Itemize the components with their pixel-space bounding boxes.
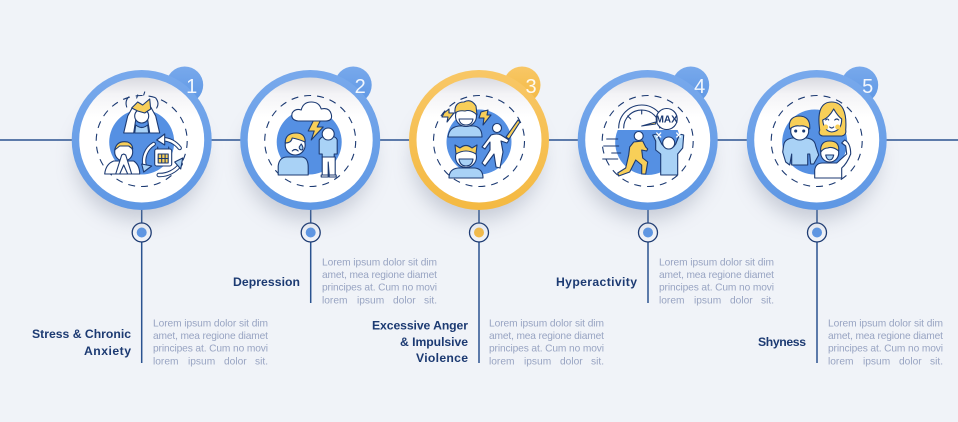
description 2	[322, 258, 437, 306]
icon: shy child with parents	[783, 102, 851, 178]
panel: step 3 excessive anger and impulsive violence	[372, 66, 604, 368]
connector with node 1	[132, 205, 151, 363]
description 5: ipsum	[863, 356, 890, 368]
description 4: lorem	[659, 296, 684, 306]
badge circle 2: 2	[355, 76, 366, 98]
connector with node 3	[470, 205, 488, 363]
description 1: Lorem ipsum dolor sit dim	[153, 318, 268, 330]
description 1: ipsum	[188, 356, 215, 368]
description 3: dolor	[560, 356, 583, 368]
description 2: ipsum	[357, 296, 384, 306]
description 2: amet, mea regione diamet	[322, 270, 437, 281]
badge circle 3	[409, 66, 549, 220]
panel: step 2 depression	[233, 66, 437, 306]
badge circle 3: 3	[525, 76, 537, 98]
description 3: ipsum	[524, 356, 551, 368]
description 4: sit.	[761, 296, 774, 306]
description 4: ipsum	[694, 296, 721, 306]
panel: step 5 shyness	[747, 66, 943, 368]
description 3: principes at. Cum no movi	[489, 344, 604, 354]
icon: stressed person and calendar cycle	[105, 92, 183, 175]
heading: excessive anger and impulsive violence: Violence	[416, 351, 468, 365]
description 5: principes at. Cum no movi	[828, 344, 943, 354]
badge circle 5	[747, 66, 887, 220]
connector with node 2	[301, 205, 320, 303]
description 5: amet, mea regione diamet	[828, 331, 943, 342]
description 2: Lorem ipsum dolor sit dim	[322, 258, 437, 268]
timeline axis	[0, 139, 958, 141]
icon: speedometer at max with running and shouting people	[603, 105, 684, 176]
description 5: lorem	[828, 356, 853, 368]
heading: shyness: Shyness	[758, 335, 806, 349]
description 1: principes at. Cum no movi	[153, 344, 268, 354]
description 2: principes at. Cum no movi	[322, 282, 437, 294]
description 4: Lorem ipsum dolor sit dim	[659, 258, 774, 268]
description 1: sit.	[255, 356, 268, 368]
description 1	[153, 318, 268, 368]
description 4: dolor	[730, 296, 753, 306]
heading: stress and chronic anxiety: Stress & Chronic	[32, 327, 131, 341]
icon: angry faces and person with bat	[442, 101, 520, 178]
description 3	[489, 318, 604, 368]
description 3: sit.	[591, 356, 604, 368]
panel: step 4 hyperactivity	[556, 66, 774, 306]
description 5: dolor	[899, 356, 922, 368]
connector with node 5	[808, 205, 826, 363]
heading: excessive anger and impulsive violence: & Impulsive	[400, 335, 468, 349]
icon: speedometer at max with running and shouting people: MAX	[656, 114, 678, 126]
heading: depression: Depression	[233, 275, 300, 289]
description 5: Lorem ipsum dolor sit dim	[828, 318, 943, 330]
description 1: amet, mea regione diamet	[153, 331, 268, 342]
heading: stress and chronic anxiety	[32, 327, 131, 358]
description 4	[659, 258, 774, 306]
heading: stress and chronic anxiety: Anxiety	[84, 344, 131, 358]
description 1: dolor	[224, 356, 247, 368]
heading: hyperactivity: Hyperactivity	[556, 275, 637, 289]
badge circle 5: 5	[862, 76, 873, 98]
badge circle 4: 4	[694, 76, 705, 98]
badge circle 2	[240, 66, 380, 220]
description 2: sit.	[424, 296, 437, 306]
badge circle 1	[72, 66, 212, 220]
heading: excessive anger and impulsive violence: Excessive Anger	[372, 318, 468, 332]
description 5	[828, 318, 943, 368]
heading: excessive anger and impulsive violence	[372, 318, 468, 365]
description 2: lorem	[322, 296, 347, 306]
badge circle 4	[578, 66, 718, 220]
description 5: sit.	[930, 356, 943, 368]
description 4: principes at. Cum no movi	[659, 282, 774, 294]
icon: sad person under storm cloud	[278, 102, 337, 177]
description 3: Lorem ipsum dolor sit dim	[489, 318, 604, 330]
description 1: lorem	[153, 356, 178, 368]
description 4: amet, mea regione diamet	[659, 270, 774, 281]
connector with node 4	[638, 205, 658, 303]
description 3: amet, mea regione diamet	[489, 331, 604, 342]
description 3: lorem	[489, 356, 514, 368]
badge circle 1: 1	[186, 76, 197, 98]
panel: step 1 stress and chronic anxiety	[32, 66, 268, 368]
description 2: dolor	[393, 296, 416, 306]
